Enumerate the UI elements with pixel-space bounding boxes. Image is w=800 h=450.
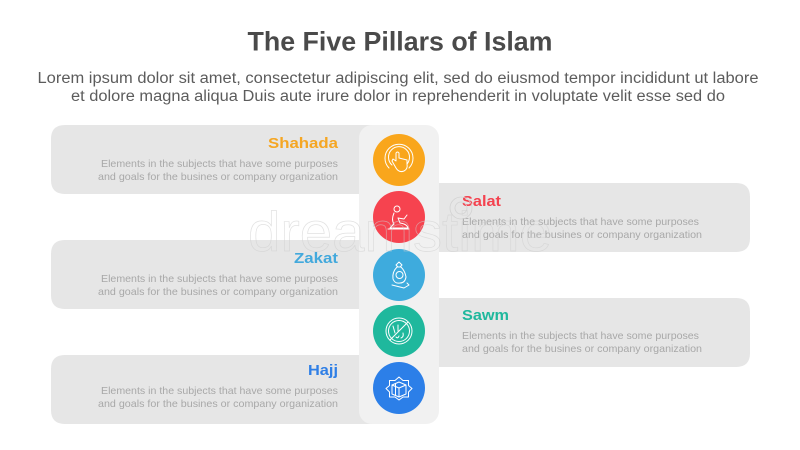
- panel: Salat: [426, 183, 750, 252]
- panel: Zakat: [51, 240, 372, 309]
- panel: Shahada: Shahada: [268, 135, 339, 152]
- icon: Hajj circle: [373, 362, 425, 414]
- panel: Zakat: Zakat: [294, 250, 338, 267]
- panel: Zakat: Elements in the subjects that have some purposes: [101, 273, 338, 285]
- panel: Sawm: Sawm: [462, 307, 509, 324]
- icon: Zakat circle: [373, 249, 425, 301]
- panel: Sawm: [426, 298, 750, 367]
- panel: Salat: Salat: [462, 193, 501, 210]
- subtitle text: Lorem ipsum dolor sit amet, consectetur adipiscing elit, sed do eiusmod tempor incididunt ut labore: [38, 70, 758, 87]
- panel: Hajj: Elements in the subjects that have some purposes: [101, 385, 338, 397]
- icon: Sawm circle: [373, 305, 425, 357]
- panel: Shahada: and goals for the busines or company organization: [98, 171, 338, 183]
- subtitle text: [38, 70, 758, 105]
- panel: Zakat: and goals for the busines or company organization: [98, 286, 338, 298]
- icon: Shahada circle: [373, 134, 425, 186]
- center column: [359, 125, 439, 424]
- panel: Salat: and goals for the busines or company organization: [462, 229, 702, 241]
- panel: Shahada: Elements in the subjects that have some purposes: [101, 158, 338, 170]
- panel: Hajj: and goals for the busines or company organization: [98, 398, 338, 410]
- subtitle text: et dolore magna aliqua Duis aute irure dolor in reprehenderit in voluptate velit esse sed do: [71, 88, 725, 105]
- watermark: dreamstime: [248, 200, 552, 263]
- title: The Five Pillars of Islam: [248, 26, 552, 56]
- panel: Shahada: [51, 125, 372, 194]
- panel: Hajj: Hajj: [308, 362, 338, 379]
- panel: Sawm: Elements in the subjects that have some purposes: [462, 330, 699, 342]
- panel: Hajj: [51, 355, 372, 424]
- panel: Salat: Elements in the subjects that have some purposes: [462, 216, 699, 228]
- icon: Salat circle: [373, 191, 425, 243]
- panel: Sawm: and goals for the busines or company organization: [462, 343, 702, 355]
